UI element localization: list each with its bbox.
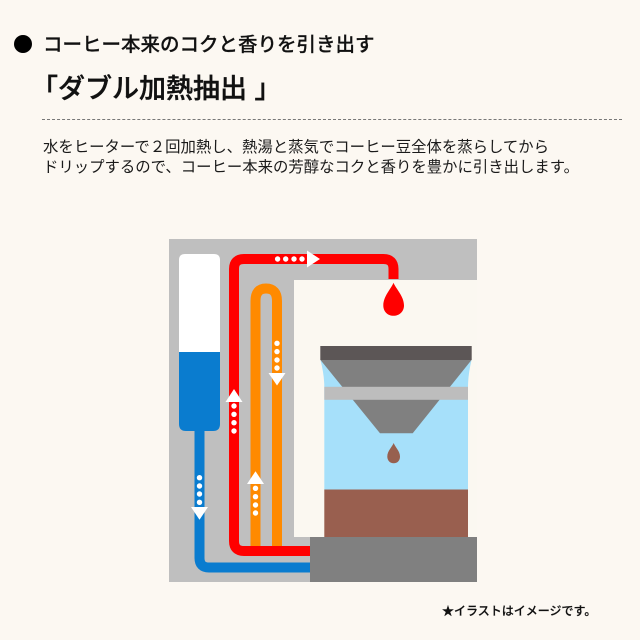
arrow: orange pipe down: [268, 341, 286, 386]
body text: ドリップするので、コーヒー本来の芳醇なコクと香りを豊かに引き出します。: [43, 159, 579, 176]
machine body background: [169, 239, 477, 582]
dripper funnel: [320, 346, 472, 433]
body text: [43, 138, 579, 176]
footnote: ★イラストはイメージです。: [442, 604, 596, 618]
body text: 水をヒーターで２回加熱し、熱湯と蒸気でコーヒー豆全体を蒸らしてから: [43, 139, 549, 156]
title: 「ダブル加熱抽出 」: [31, 74, 282, 104]
red hot water drop: [383, 283, 404, 316]
arrow: orange pipe up: [247, 471, 264, 516]
water tank: [179, 254, 220, 431]
divider: [42, 119, 622, 120]
red pipe: [234, 259, 394, 551]
subheading: コーヒー本来のコクと香りを引き出す: [43, 34, 375, 56]
bullet icon: [14, 35, 32, 53]
carafe band: [324, 387, 468, 400]
brewed coffee: [324, 490, 468, 537]
arrow: red pipe up: [226, 389, 242, 434]
arrow: red pipe right: [275, 250, 320, 268]
orange pipe: [256, 288, 277, 547]
arrow: blue pipe down: [191, 475, 208, 520]
coffee drop: [387, 443, 400, 463]
blue pipe: [200, 431, 312, 568]
heater base: [310, 537, 477, 582]
carafe glass: [320, 360, 472, 490]
